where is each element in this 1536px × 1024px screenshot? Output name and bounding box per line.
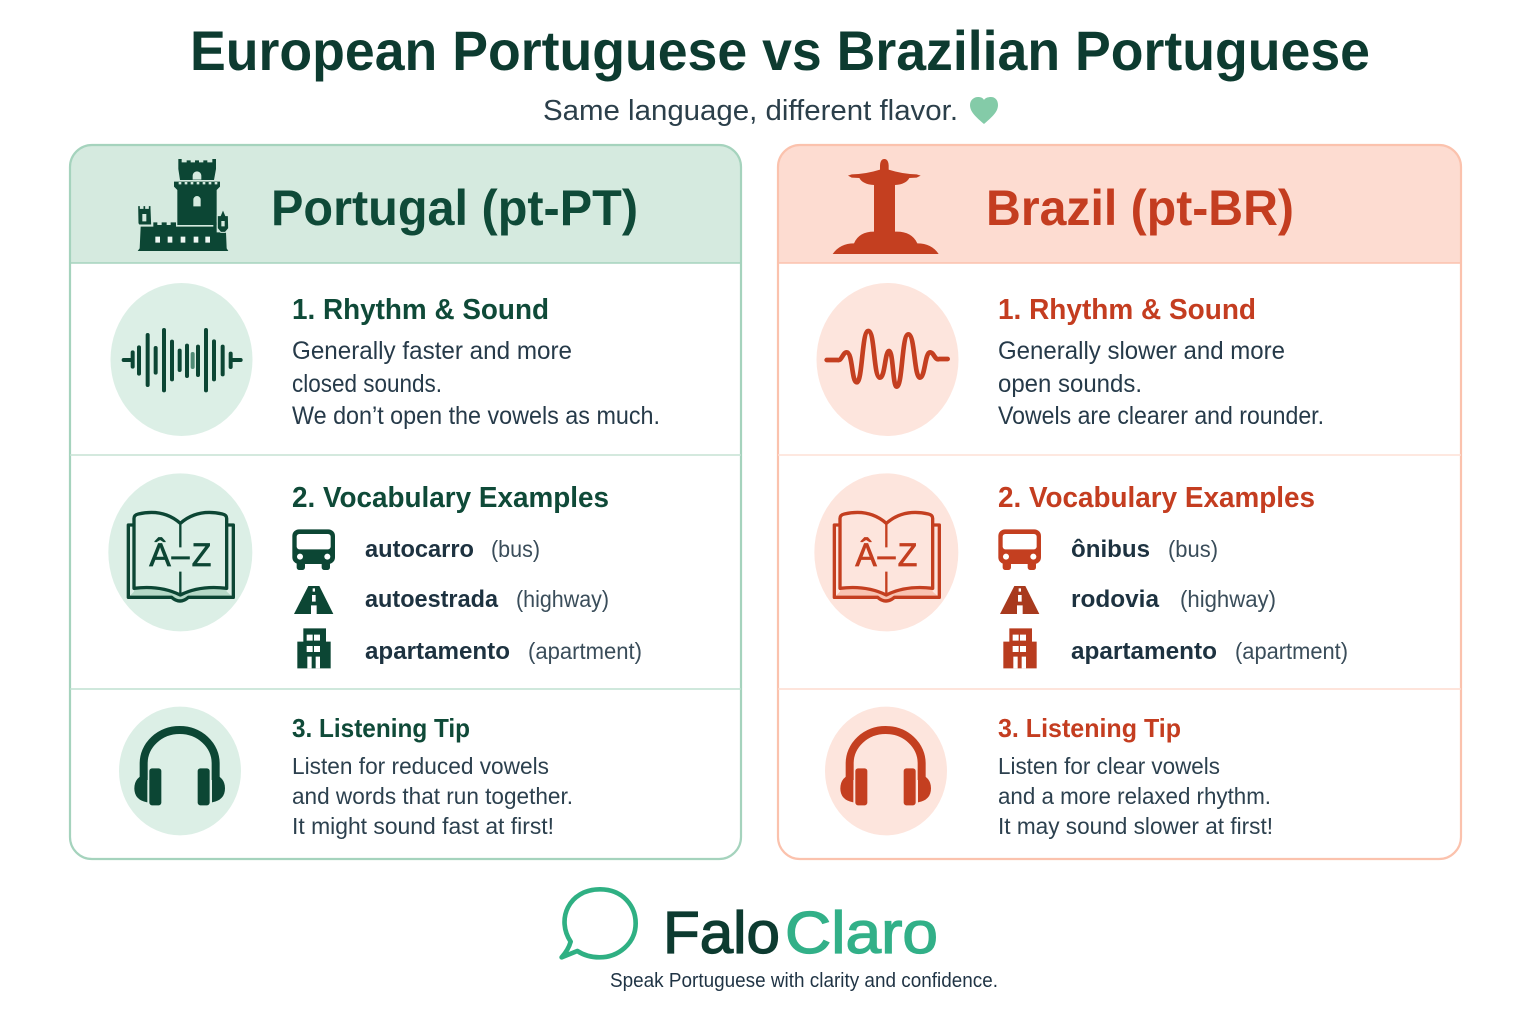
heading: Brazil: Brazil (pt-BR) <box>986 180 1294 236</box>
text: listening tip <box>292 713 573 839</box>
vocabulary row: onibus: ônibus <box>1071 536 1150 563</box>
icon: dictionary <box>108 473 252 631</box>
vocabulary row: autoestrada: (highway) <box>516 586 609 612</box>
text: rhythm and sound <box>292 294 660 430</box>
icon: highway <box>1000 586 1039 614</box>
icon: dictionary: Â–Z <box>149 537 211 573</box>
vocabulary row: apartamento: (apartment) <box>528 638 642 664</box>
subtitle: Same language, different flavor. <box>543 95 958 127</box>
text: rhythm and sound: Vowels are clearer and rounder. <box>998 402 1324 430</box>
icon: apartment building <box>297 628 331 668</box>
icon: sound wave <box>110 283 252 436</box>
icon: bus <box>998 529 1041 570</box>
text: rhythm and sound: Generally slower and more <box>998 337 1285 365</box>
icon: highway <box>294 586 333 614</box>
icon: Belem tower <box>138 159 229 251</box>
text: listening tip: 3. Listening Tip <box>292 713 470 743</box>
text: listening tip: It may sound slower at first! <box>998 813 1273 839</box>
logo: FaloClaro <box>562 889 998 992</box>
icon: apartment building <box>1003 628 1037 668</box>
panel: Brazil <box>778 145 1461 859</box>
icon: headphones <box>119 707 241 835</box>
text: rhythm and sound: Generally faster and more <box>292 337 572 365</box>
panel header: Brazil <box>778 145 1461 263</box>
text: listening tip: 3. Listening Tip <box>998 713 1181 743</box>
icon: bus <box>292 529 335 570</box>
heading: vocabulary: 2. Vocabulary Examples <box>998 482 1315 514</box>
text: rhythm and sound: 1. Rhythm & Sound <box>998 294 1256 326</box>
icon: speech bubble <box>562 889 636 957</box>
text: listening tip: and a more relaxed rhythm. <box>998 783 1271 809</box>
text: rhythm and sound: We don’t open the vowels as much. <box>292 402 660 430</box>
text: listening tip <box>998 713 1273 839</box>
vocabulary row: autoestrada: autoestrada <box>365 586 499 613</box>
text: listening tip: It might sound fast at first! <box>292 813 554 839</box>
vocabulary row: rodovia: rodovia <box>1071 586 1160 613</box>
vocabulary row: apartamento <box>1071 638 1348 665</box>
vocabulary row: onibus: (bus) <box>1168 536 1218 562</box>
icon: sound wave <box>816 283 958 436</box>
vocabulary row: rodovia <box>1071 586 1276 613</box>
text: listening tip: Listen for clear vowels <box>998 753 1220 779</box>
vocabulary row: apartamento: apartamento <box>365 638 510 665</box>
text: rhythm and sound: 1. Rhythm & Sound <box>292 294 549 326</box>
panel: Portugal <box>70 145 741 859</box>
vocabulary row: rodovia: (highway) <box>1180 586 1276 612</box>
vocabulary row: autocarro <box>365 536 540 563</box>
panel header: Portugal <box>70 145 741 263</box>
vocabulary row: autocarro: (bus) <box>491 536 540 562</box>
heading: Portugal: Portugal (pt-PT) <box>271 180 638 236</box>
icon: Christ the Redeemer <box>833 159 939 254</box>
icon: heart <box>970 97 998 124</box>
vocabulary row: onibus <box>1071 536 1218 563</box>
vocabulary row: autoestrada <box>365 586 609 613</box>
tagline: Speak Portuguese with clarity and confidence. <box>610 970 998 992</box>
vocabulary row: apartamento: apartamento <box>1071 638 1217 665</box>
icon: dictionary <box>814 473 958 631</box>
icon: dictionary: Â–Z <box>855 537 917 573</box>
vocabulary row: apartamento <box>365 638 642 665</box>
text: rhythm and sound: closed sounds. <box>292 370 442 398</box>
text: rhythm and sound <box>998 294 1324 430</box>
text: listening tip: Listen for reduced vowels <box>292 753 549 779</box>
icon: headphones <box>825 707 947 835</box>
vocabulary row: apartamento: (apartment) <box>1235 638 1348 664</box>
wordmark: Claro: Claro <box>785 900 938 966</box>
text: listening tip: and words that run together. <box>292 783 573 809</box>
vocabulary row: autocarro: autocarro <box>365 536 474 563</box>
heading: vocabulary: 2. Vocabulary Examples <box>292 482 609 514</box>
wordmark: Falo: Falo <box>663 900 780 966</box>
text: rhythm and sound: open sounds. <box>998 370 1142 398</box>
title: European Portuguese vs Brazilian Portuguese <box>190 19 1370 82</box>
